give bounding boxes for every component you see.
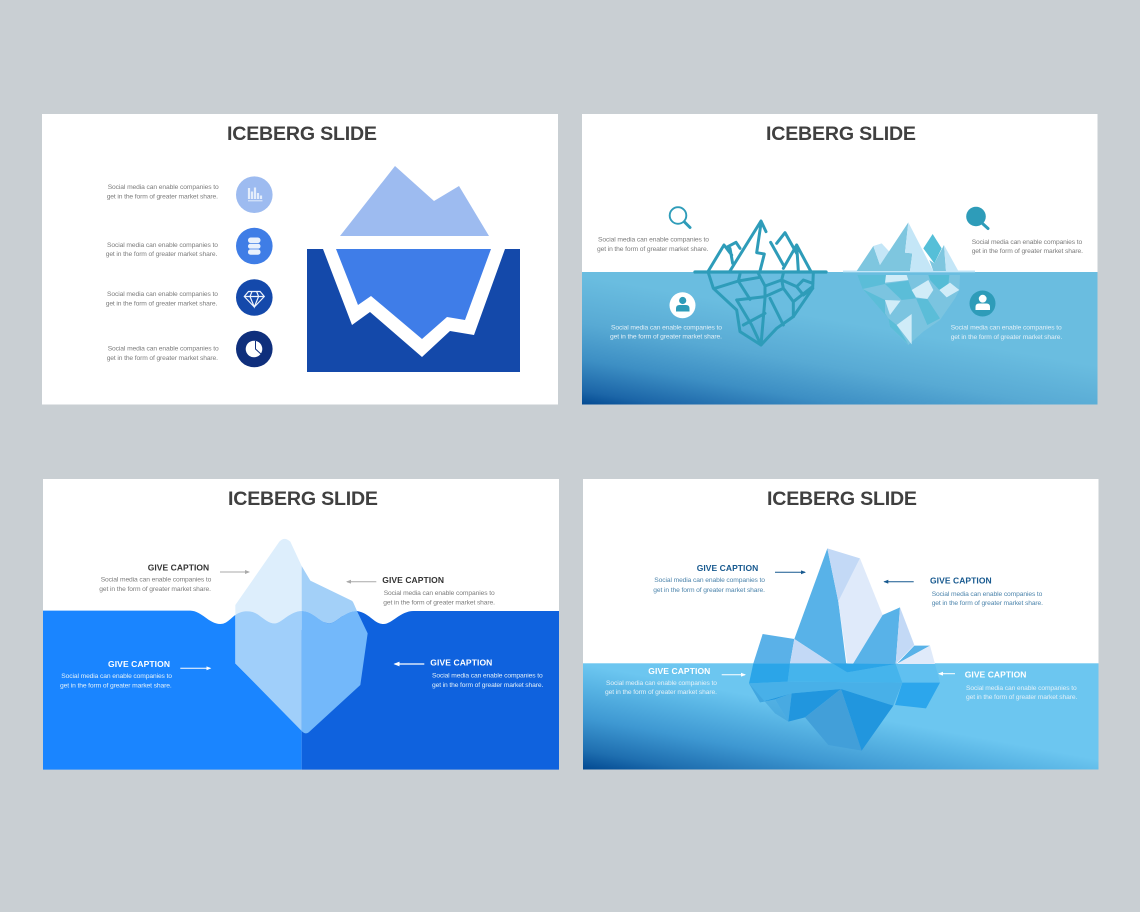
arrow: top left (220, 571, 249, 573)
arrow: bottom left (180, 667, 210, 669)
iceberg: above water facets (753, 548, 935, 672)
caption: top left: Social media can enable companies to (101, 576, 212, 584)
water (43, 611, 559, 770)
text block: bottom left: get in the form of greater market share. (610, 334, 722, 341)
icon: database (236, 228, 273, 264)
arrow: bottom left (722, 674, 745, 676)
caption: bottom right (965, 670, 1077, 701)
text block: row 2 (106, 242, 218, 258)
caption: top right (382, 575, 495, 606)
icon: bar chart (236, 176, 273, 213)
title: ICEBERG SLIDE (228, 488, 378, 510)
icon: outline magnifier (670, 207, 690, 228)
caption: bottom right: Social media can enable companies to (966, 685, 1077, 692)
filled iceberg (857, 222, 960, 345)
text block: row 4 (107, 346, 219, 362)
icon: diamond (236, 279, 273, 316)
panel: faceted iceberg with captions (583, 479, 1098, 770)
water (583, 663, 1098, 770)
faceted iceberg (749, 548, 940, 751)
text block: row 2: get in the form of greater market share. (106, 251, 217, 258)
caption: top left (653, 563, 765, 594)
caption: bottom left: get in the form of greater market share. (60, 682, 172, 690)
caption: top right (930, 576, 1043, 607)
arrow: top right (347, 581, 376, 583)
caption: top right: GIVE CAPTION (382, 575, 444, 585)
title: ICEBERG SLIDE (766, 123, 916, 145)
text block: row 4: get in the form of greater market share. (107, 355, 218, 362)
text block: top right: Social media can enable companies to (972, 239, 1082, 246)
arrow: top left (775, 571, 805, 573)
text block: top left: Social media can enable companies to (598, 236, 709, 244)
icon: pie chart (236, 331, 273, 367)
arrow: top right (884, 581, 914, 583)
text block: row 1: Social media can enable companies to (108, 184, 219, 191)
iceberg (235, 539, 368, 733)
text block: bottom right: get in the form of greater market share. (951, 334, 1062, 341)
text block: top right: get in the form of greater market share. (972, 248, 1083, 255)
caption: top left: get in the form of greater market share. (99, 586, 211, 593)
caption: top right: Social media can enable companies to (932, 591, 1043, 598)
title: ICEBERG SLIDE (227, 123, 377, 145)
caption: bottom left: get in the form of greater market share. (605, 689, 717, 696)
text block: top right (972, 239, 1083, 255)
caption: bottom left: Social media can enable companies to (61, 673, 172, 680)
line iceberg (695, 221, 826, 345)
caption: top left: GIVE CAPTION (148, 562, 209, 572)
text block: row 1: get in the form of greater market share. (107, 194, 218, 200)
text block: row 1 (107, 184, 219, 200)
text block: bottom right: Social media can enable companies to (951, 325, 1062, 332)
text block: row 3 (106, 291, 218, 308)
arrow: bottom right (939, 673, 955, 675)
arrow: bottom right (395, 663, 424, 665)
filled iceberg waterline (843, 270, 975, 272)
caption: bottom right: get in the form of greater market share. (432, 682, 543, 689)
caption: bottom left (605, 666, 717, 696)
sea with cut-out (307, 249, 520, 372)
caption: top left: GIVE CAPTION (697, 563, 758, 573)
icon: filled magnifier (966, 207, 988, 228)
icon: teal person badge (970, 290, 996, 316)
caption: top left: Social media can enable companies to (654, 577, 765, 584)
caption: bottom right: get in the form of greater market share. (966, 694, 1077, 701)
caption: bottom left: GIVE CAPTION (108, 659, 170, 669)
title: ICEBERG SLIDE (767, 488, 917, 510)
caption: top right: GIVE CAPTION (930, 576, 992, 586)
iceberg tip (340, 166, 489, 236)
caption: bottom right: GIVE CAPTION (965, 670, 1026, 680)
caption: bottom left (60, 659, 172, 690)
panel: two-tone iceberg with captions (43, 479, 559, 770)
water (582, 272, 1098, 404)
caption: bottom right: GIVE CAPTION (430, 658, 492, 668)
text block: row 2: Social media can enable companies to (107, 242, 218, 249)
caption: top right: get in the form of greater market share. (383, 600, 495, 606)
caption: top left: get in the form of greater market share. (653, 587, 765, 594)
text block: row 3: Social media can enable companies to (107, 291, 218, 298)
caption: bottom right (430, 658, 543, 689)
panel: line and filled icebergs (582, 114, 1098, 404)
caption: top right: get in the form of greater market share. (932, 600, 1043, 607)
caption: bottom left: Social media can enable companies to (606, 680, 717, 687)
caption: top right: Social media can enable companies to (384, 590, 495, 597)
iceberg: submerged facets (749, 663, 940, 751)
text block: bottom left (610, 324, 722, 341)
text block: top left (597, 236, 709, 253)
text block: row 3: get in the form of greater market share. (106, 300, 217, 308)
caption: top left (99, 562, 212, 593)
icon: white person badge (670, 292, 696, 318)
iceberg submerged (336, 249, 491, 339)
text block: top left: get in the form of greater market share. (597, 246, 709, 253)
caption: bottom right: Social media can enable companies to (432, 672, 543, 680)
text block: row 4: Social media can enable companies to (108, 346, 219, 352)
text block: bottom right (951, 325, 1062, 341)
text block: bottom left: Social media can enable companies to (611, 324, 722, 331)
caption: bottom left: GIVE CAPTION (648, 666, 710, 676)
panel: flat iceberg with icon list (42, 114, 558, 404)
